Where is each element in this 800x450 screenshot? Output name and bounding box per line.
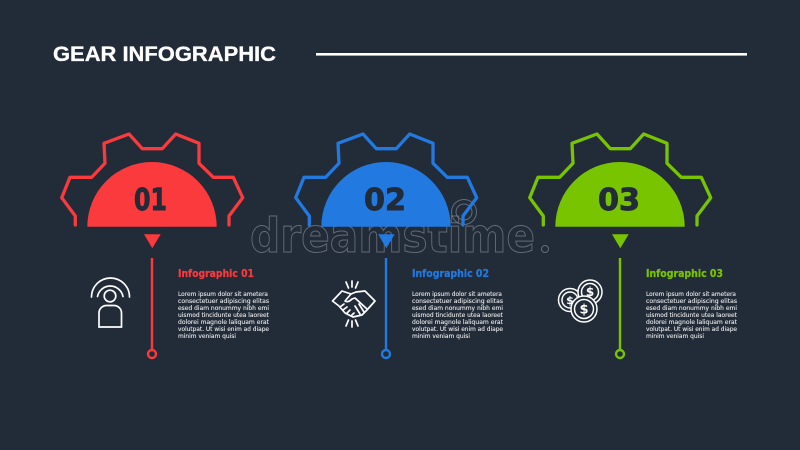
panel: infographic 02 [296, 134, 504, 358]
heading 03: Infographic 03 [646, 268, 723, 280]
heading 02: Infographic 02 [412, 268, 489, 280]
connector blue [382, 258, 390, 358]
body text 03: consectetuer adipiscing elitas [646, 298, 737, 305]
body text 01: consectetuer adipiscing elitas [178, 298, 269, 305]
body text 01: dolorei magnole laliquam erat [178, 319, 270, 326]
body text 01: volutpat. Ut wisi enim ad diape [178, 326, 269, 333]
body text 01: Lorem ipsum dolor sit ametera [178, 291, 268, 298]
body text 03: esed diam nonummy nibh emi [646, 305, 737, 312]
body text 02: uismod tincidunte utea laoreet [412, 312, 504, 319]
icon: coins: $ [566, 294, 574, 307]
watermark: dreamstime [250, 209, 535, 264]
half gear disc red [87, 162, 217, 227]
body text 02: minim veniam quisi [412, 333, 470, 340]
panel: infographic 01 [62, 134, 270, 358]
body text 02 [412, 291, 504, 340]
body text 03 [646, 291, 738, 340]
icon: coins: $ [586, 285, 594, 299]
number 02: 02 [364, 183, 406, 218]
pointer green [612, 234, 629, 248]
icon: coins: $ [579, 302, 589, 318]
body text 01: esed diam nonummy nibh emi [178, 305, 269, 312]
body text 03: Lorem ipsum dolor sit ametera [646, 291, 736, 298]
body text 02: consectetuer adipiscing elitas [412, 298, 503, 305]
pointer red [144, 234, 161, 248]
body text 01: minim veniam quisi [178, 333, 236, 340]
body text 02: esed diam nonummy nibh emi [412, 305, 503, 312]
body text 03: uismod tincidunte utea laoreet [646, 312, 738, 319]
body text 03: minim veniam quisi [646, 333, 704, 340]
half gear disc green [555, 162, 685, 227]
icon: person broadcasting [92, 278, 130, 327]
icon: handshake [332, 281, 375, 327]
heading 01: Infographic 01 [178, 268, 254, 280]
number 01: 01 [134, 183, 167, 218]
gear outline blue [296, 134, 477, 225]
panel: infographic 03 [530, 134, 738, 358]
half gear disc blue [321, 162, 451, 227]
pointer blue [378, 234, 395, 248]
body text 01: uismod tincidunte utea laoreet [178, 312, 270, 319]
body text 02: dolorei magnole laliquam erat [412, 319, 504, 326]
connector green [616, 258, 624, 358]
body text 02: Lorem ipsum dolor sit ametera [412, 291, 502, 298]
body text 03: dolorei magnole laliquam erat [646, 319, 738, 326]
body text 01 [178, 291, 270, 340]
number 03: 03 [598, 183, 640, 218]
gear outline red [62, 134, 243, 225]
connector red [148, 258, 156, 358]
body text 02: volutpat. Ut wisi enim ad diape [412, 326, 503, 333]
title rule [316, 53, 747, 56]
body text 03: volutpat. Ut wisi enim ad diape [646, 326, 737, 333]
icon: coins [558, 280, 602, 322]
gear outline green [530, 134, 711, 225]
title: GEAR INFOGRAPHIC [53, 43, 276, 66]
